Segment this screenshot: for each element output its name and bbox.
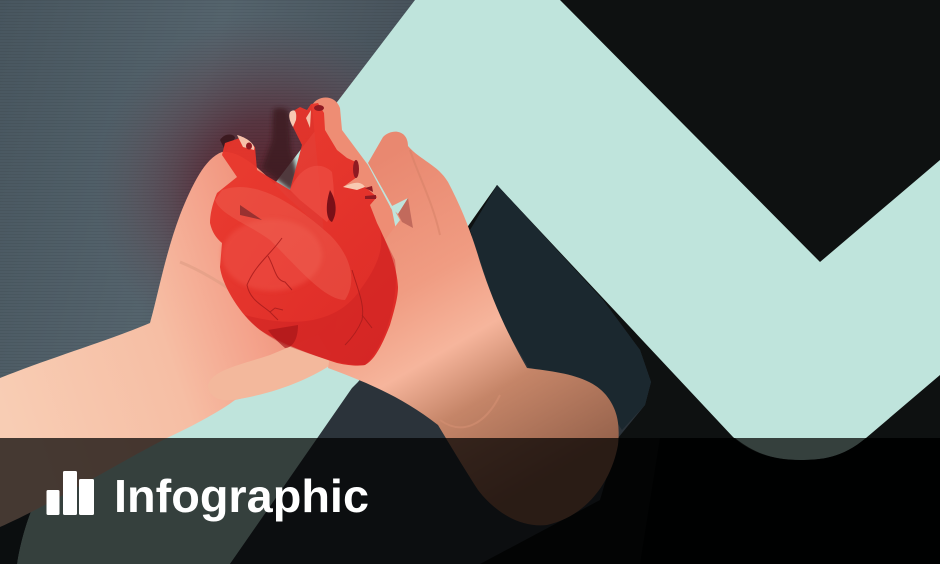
shirt: dark lower body and sleeve [0, 185, 651, 564]
hand: left hand and forearm [0, 152, 350, 527]
black cover on right of bar [640, 438, 940, 564]
shirt: torso left side [0, 0, 420, 440]
pulmonary trunk lobe [290, 166, 334, 222]
heart base silhouette [210, 103, 398, 366]
dark gaps in heart [327, 190, 336, 222]
shirt shadow gaps between fingers [220, 108, 298, 192]
finger nails [246, 105, 376, 199]
shadowed wedge at base [268, 325, 298, 348]
pale finger tips [289, 110, 296, 127]
coronary arteries [247, 238, 372, 345]
icon: bar chart [46, 471, 94, 515]
lighter left ventricle lobe [222, 219, 322, 291]
index finger behind heart [312, 97, 410, 300]
heart illustration [210, 103, 398, 366]
translucent finger band across heart [215, 187, 351, 300]
bottom title bar overlay [0, 438, 940, 564]
hand: right hand and forearm [312, 97, 619, 525]
left thumb [208, 335, 335, 400]
notch of pale skin near arteries [343, 183, 365, 190]
gap between thumb and finger [390, 198, 408, 214]
darker lower ventricle [245, 230, 396, 365]
title: Infographic: Infographic [114, 470, 369, 522]
